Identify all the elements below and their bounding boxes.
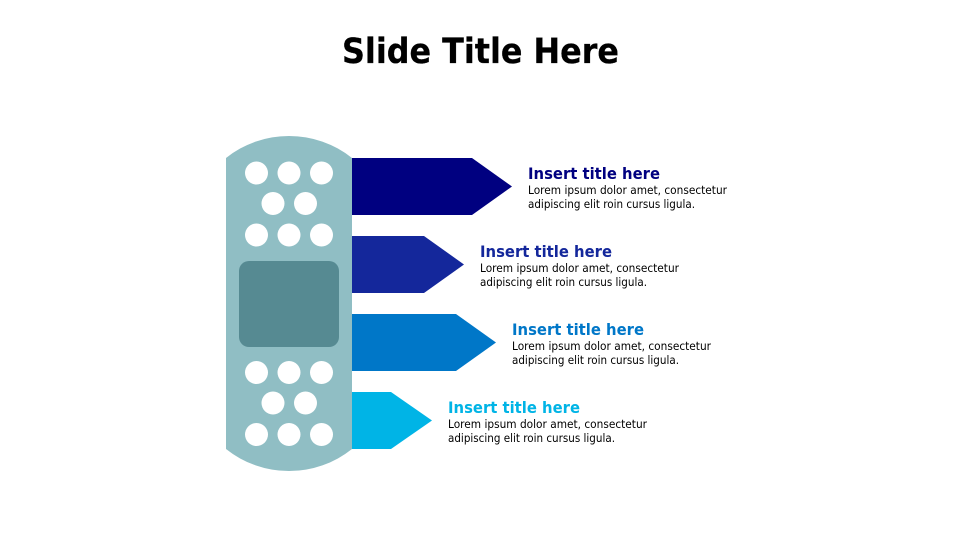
text block 4: Insert title here [448,398,580,417]
text block 4 [448,398,647,445]
text block 2: Lorem ipsum dolor amet, consectetur [480,261,679,275]
text block 4: adipiscing elit roin cursus ligula. [448,431,615,445]
text block 2: adipiscing elit roin cursus ligula. [480,275,647,289]
text block 1: Insert title here [528,164,660,183]
text block 1: adipiscing elit roin cursus ligula. [528,197,695,211]
text block 2: Insert title here [480,242,612,261]
text block 4: Lorem ipsum dolor amet, consectetur [448,417,647,431]
text block 3: adipiscing elit roin cursus ligula. [512,353,679,367]
text block 3: Lorem ipsum dolor amet, consectetur [512,339,711,353]
text block 3 [512,320,711,367]
arrow 1 [352,158,512,215]
arrow 4 [352,392,432,449]
bandage centre pad [239,261,339,347]
top holes [245,162,333,246]
title: Slide Title Here [342,32,619,72]
text block 1 [528,164,727,211]
text block 2 [480,242,679,289]
bottom holes [245,361,333,446]
bandage body [226,136,352,471]
text block 1: Lorem ipsum dolor amet, consectetur [528,183,727,197]
text block 3: Insert title here [512,320,644,339]
arrow 2 [352,236,464,293]
icon: bandage [226,136,352,471]
arrow 3 [352,314,496,371]
